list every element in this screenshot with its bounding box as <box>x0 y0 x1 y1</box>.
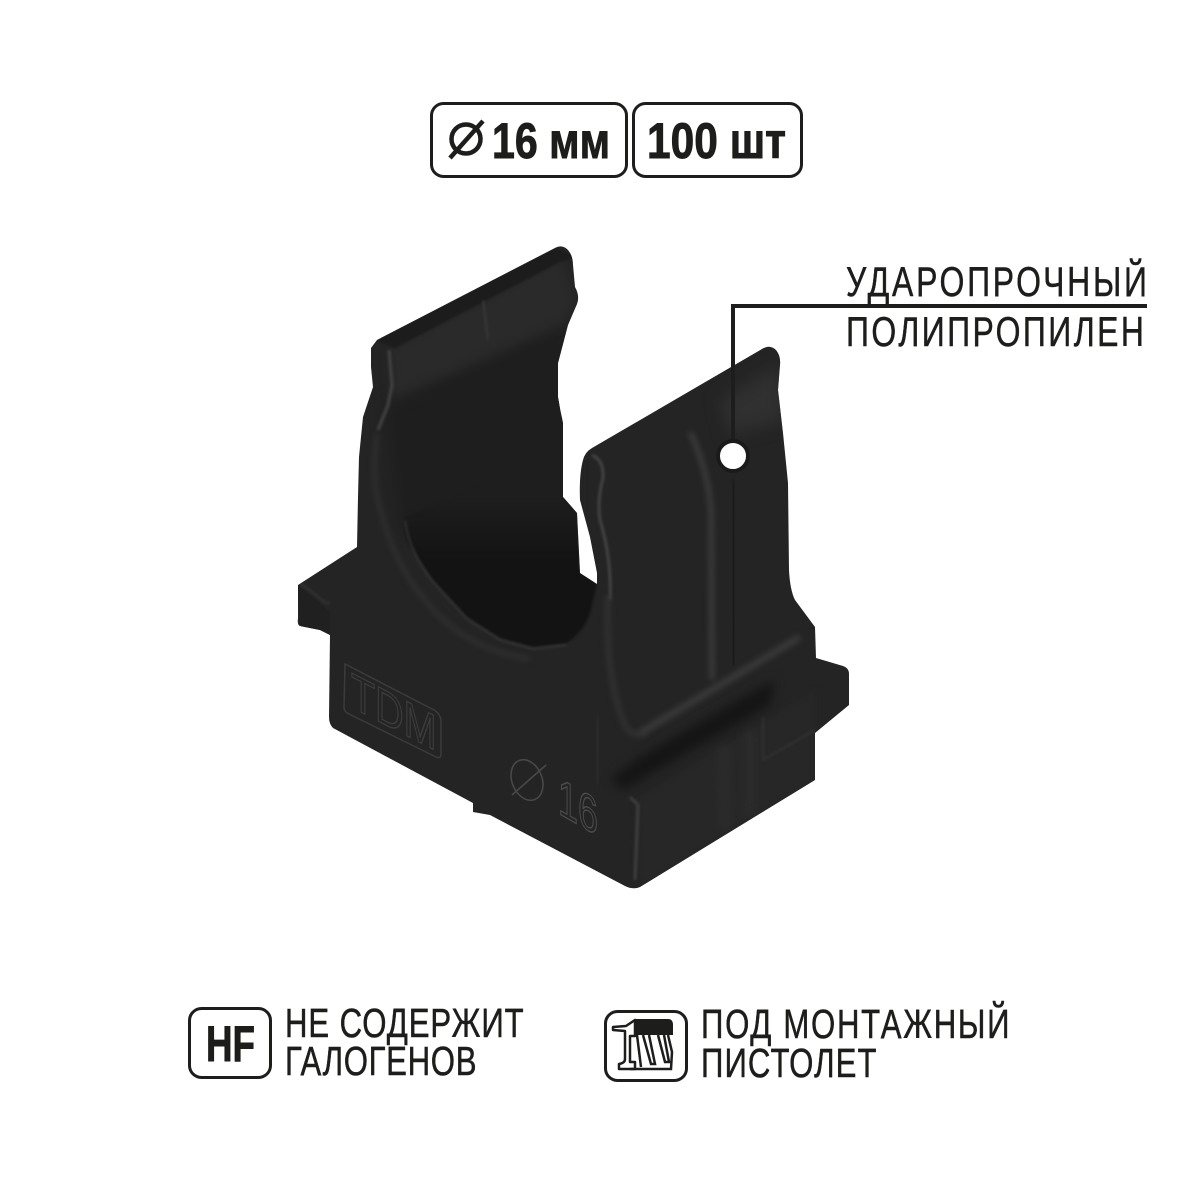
feature: for mounting gun <box>606 1000 1010 1086</box>
feature: halogen free <box>190 1000 524 1084</box>
left prong ridge highlight <box>378 350 392 430</box>
badge: 100 pieces: 100 шт <box>647 113 786 169</box>
text: for mounting gun: ПОД МОНТАЖНЫЙ <box>701 1000 1010 1047</box>
embossed logo plate: TDM <box>351 662 436 762</box>
text: for mounting gun: ПИСТОЛЕТ <box>701 1040 877 1086</box>
left prong top band <box>570 284 578 320</box>
icon: HF badge <box>190 1008 270 1078</box>
hollow of the clip <box>403 488 597 647</box>
left flange <box>300 626 330 635</box>
embossed size mark <box>505 755 598 848</box>
badge: diameter 16 mm: 16 мм <box>492 113 610 169</box>
left prong inner face <box>558 323 574 510</box>
text: halogen free: НЕ СОДЕРЖИТ <box>285 1000 524 1046</box>
icon: HF badge: HF <box>206 1016 255 1072</box>
embossed size mark: 16 <box>558 767 598 848</box>
groove above the base <box>616 686 772 787</box>
callout leader line and marker <box>718 306 1147 471</box>
right prong base ridge <box>640 637 800 733</box>
right prong shading <box>728 367 782 426</box>
callout: material <box>846 258 1147 355</box>
base front edge <box>630 797 638 880</box>
icon: mounting gun <box>606 1012 686 1080</box>
callout: material: ПОЛИПРОПИЛЕН <box>846 308 1144 355</box>
base front block <box>641 730 818 886</box>
text: halogen free: ГАЛОГЕНОВ <box>285 1038 477 1084</box>
text: for mounting gun <box>701 1000 1010 1086</box>
text: halogen free <box>285 1000 524 1084</box>
badge: diameter 16 mm <box>432 104 626 176</box>
callout: material: УДАРОПРОЧНЫЙ <box>846 258 1147 305</box>
icon: diameter sign <box>450 121 483 158</box>
base side vertical band <box>597 715 598 785</box>
badge: 100 pieces <box>634 104 802 176</box>
hollow rim highlight <box>374 435 530 659</box>
product photo: black pipe clip <box>298 246 849 888</box>
